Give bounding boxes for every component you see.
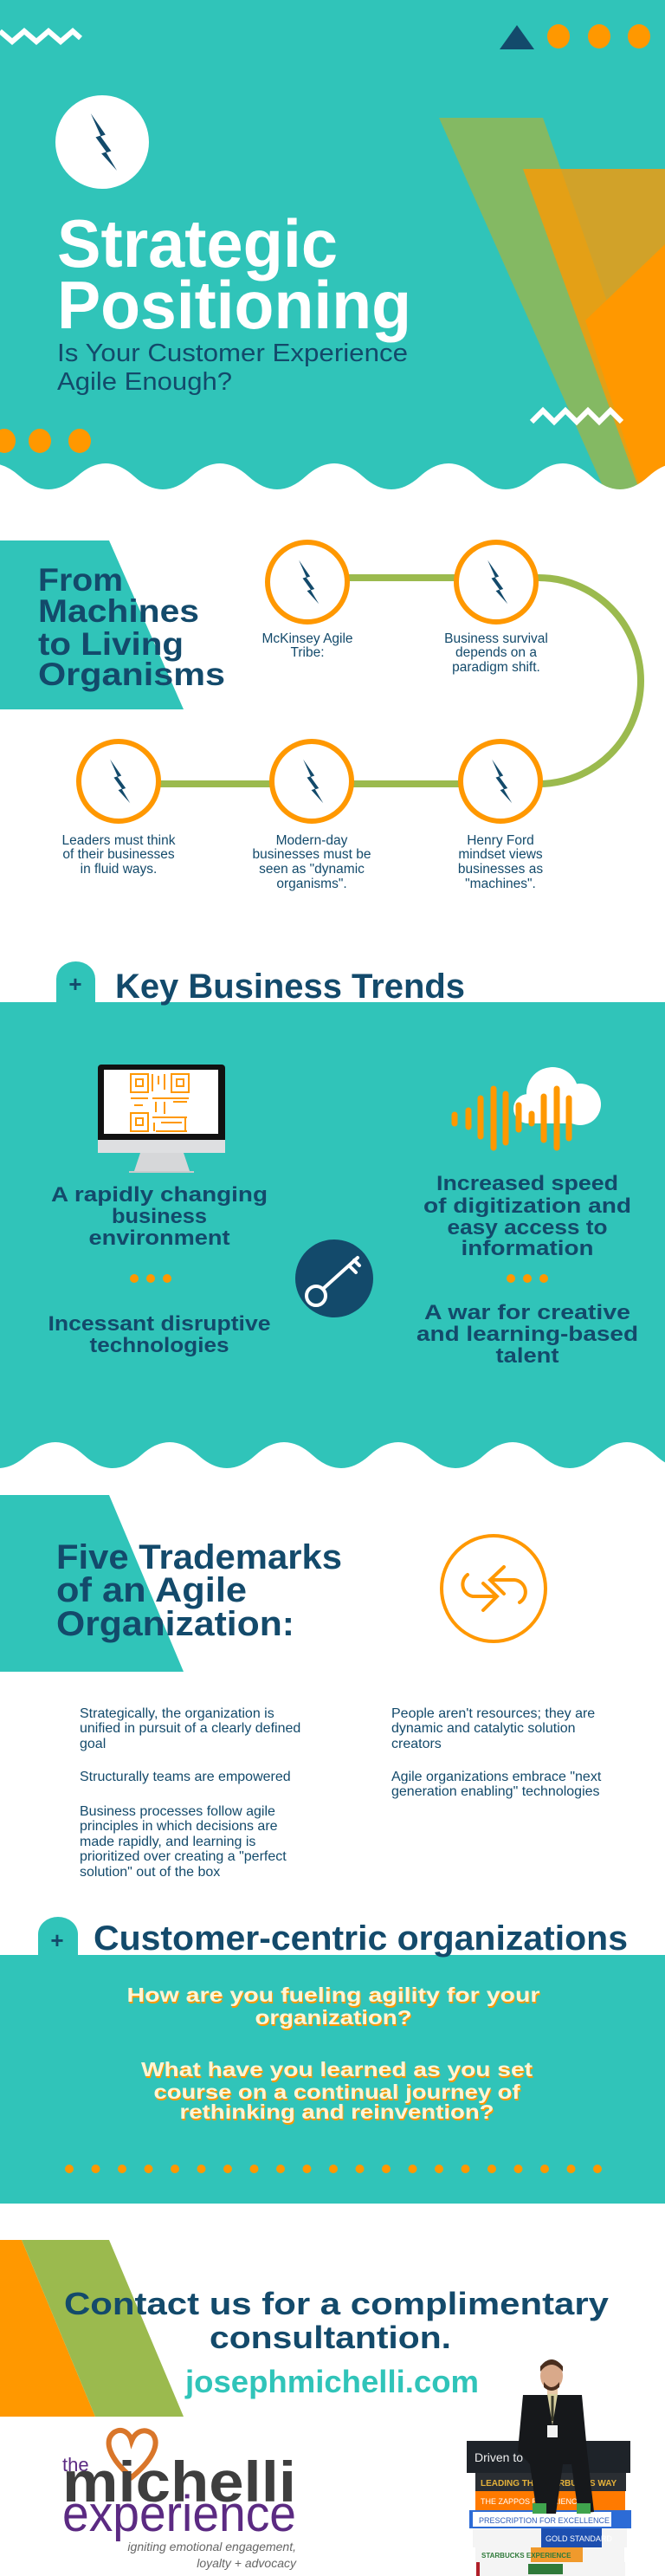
step: Modern-day [253,741,371,891]
step: Modern-day: seen as "dynamic [259,862,365,877]
photo: man on books [467,2359,631,2576]
panel: five trademarks [0,1495,602,1880]
panel: customer-centric organizations [0,1917,665,2204]
bullet list right: People aren't resources; they are [391,1706,595,1721]
text: digitization [423,1172,631,1260]
icon: monitor with QR [98,1065,225,1173]
logo: experience [62,2486,296,2542]
decorative stripes [0,2240,184,2417]
photo: man on books: GOLD STANDARD [546,2534,612,2543]
zigzag right [532,411,622,422]
text: war for talent: A war for creative [424,1301,630,1324]
connector path [119,578,641,784]
subtitle: Agile Enough? [57,368,232,396]
call to action [64,2286,609,2355]
step: Leaders: in fluid ways. [81,862,157,877]
question 2: course on a continual journey of [154,2082,521,2105]
bullet list left: principles in which decisions are [80,1819,278,1834]
step: Business survival: Business survival [444,631,548,646]
step: Leaders: Leaders must think [62,833,176,848]
heading background [0,1495,184,1672]
question 1: organization? [255,2006,412,2029]
title: Strategic [57,205,338,282]
step: Leaders [62,741,176,877]
bullet list right: dynamic and catalytic solution [391,1721,576,1736]
text: war for talent: and learning-based [416,1323,638,1346]
heading: Organisms [38,657,225,692]
photo: man on books: PRESCRIPTION FOR EXCELLENCE [479,2516,610,2525]
text: war for talent [416,1301,638,1368]
question 2: What have you learned as you set [141,2058,533,2081]
subtitle: Is Your Customer Experience [57,340,408,367]
step: Henry Ford [458,741,543,891]
step: Henry Ford: "machines". [465,877,536,891]
step: Henry Ford: Henry Ford [467,833,534,848]
text: war for talent: talent [495,1344,559,1368]
step: Modern-day: Modern-day [276,833,348,848]
heading tab: + [50,1927,64,1953]
bullet list left: Business processes follow agile [80,1804,275,1819]
bullet list right: Agile organizations embrace "next [391,1770,602,1784]
bullet list left: made rapidly, and learning is [80,1835,255,1849]
call to action: consultantion. [210,2320,451,2355]
bullet list left: solution" out of the box [80,1865,220,1880]
dots right [507,1274,548,1283]
photo: man on books: STARBUCKS EXPERIENCE [481,2552,571,2560]
heading tab: + [68,971,82,997]
heading background [0,540,184,709]
logo: michelli [62,2450,296,2514]
photo: man on books: Driven to Delight [475,2450,565,2464]
zigzag top left [0,31,81,42]
dots left [130,1274,171,1283]
panel: machines to organisms [0,540,641,891]
decorative shapes right [439,118,665,494]
dotted divider [65,2165,602,2173]
dots left [0,429,91,453]
panel: contact [0,2240,631,2576]
triangle and dots top right [500,24,650,49]
heading: Organization: [56,1605,294,1643]
subtitle [57,340,408,396]
step: Business survival: depends on a [455,645,537,660]
heading: to Living [38,626,184,662]
heading: Key Business Trends [115,968,465,1006]
step: McKinsey: McKinsey Agile [261,631,353,646]
call to action: Contact us for a complimentary [64,2286,609,2321]
icon: key [295,1239,373,1317]
heading: Customer-centric organizations [94,1919,628,1958]
question 1 [126,1984,541,2030]
step: Modern-day: businesses must be [253,847,371,862]
title [57,205,411,343]
heading tab [56,961,95,1002]
step: Business survival: paradigm shift. [452,660,540,675]
question 1: How are you fueling agility for your [128,1985,541,2008]
logo: loyalty + advocacy [197,2556,297,2570]
question 2: rethinking and reinvention? [180,2102,495,2125]
step: Leaders: of their businesses [62,847,175,862]
text: disruptive: technologies [90,1334,229,1357]
question 1: How are you fueling agility for your [126,1984,540,2006]
heading [56,1538,342,1643]
heading: Machines [38,593,199,629]
heading [38,562,225,692]
heading: of an Agile [56,1571,247,1609]
logo [62,2430,297,2570]
man [518,2395,594,2514]
text: digitization: of digitization and [423,1194,631,1218]
logo: igniting emotional engagement, [127,2540,296,2553]
icon: lightning in white circle [55,95,149,189]
bullet list left [80,1706,300,1880]
question 2: What have you learned as you set [142,2060,533,2082]
icon: cloud with sound wave [455,1067,601,1148]
question 1: organization? [256,2008,412,2030]
step: Henry Ford: businesses as [458,862,543,877]
photo: man on books: THE ZAPPOS EXPERIENCE [481,2497,583,2506]
step: McKinsey [261,542,353,660]
bullet list left: Structurally teams are empowered [80,1770,291,1784]
question 2: course on a continual journey of [154,2081,520,2103]
step: Modern-day: organisms". [276,877,347,891]
text: digitization: information [461,1237,594,1260]
text: digitization: easy access to [447,1216,608,1239]
title: Positioning [57,267,411,343]
heading: Five Trademarks [56,1538,342,1576]
bullet list right: generation enabling" technologies [391,1784,600,1799]
bullet list left: unified in pursuit of a clearly defined [80,1721,300,1736]
question 2: rethinking and reinvention? [180,2100,494,2123]
text: disruptive [48,1312,270,1357]
step: McKinsey: Tribe: [290,645,325,660]
text: digitization: Increased speed [436,1172,618,1195]
bullet list left: Strategically, the organization is [80,1706,274,1721]
text: rapidly changing [51,1183,268,1250]
heading tab [38,1917,78,1955]
icon: refresh arrows [442,1536,546,1641]
bullet list left: goal [80,1737,106,1751]
text: rapidly changing: business [112,1205,207,1228]
website: josephmichelli.com [184,2364,479,2399]
text: rapidly changing: A rapidly changing [51,1183,268,1207]
heading: From [38,562,123,598]
bullet list right: creators [391,1737,442,1751]
bullet list right [391,1706,602,1799]
photo: man on books: LEADING THE STARBUCKS WAY [481,2479,617,2489]
text: disruptive: Incessant disruptive [48,1312,270,1336]
logo: the [62,2454,89,2476]
question 2 [141,2058,533,2125]
text: rapidly changing: environment [88,1227,230,1250]
panel: key business trends [0,961,665,1481]
step: Henry Ford: mindset views [458,847,543,862]
step: Business survival [444,542,548,675]
bullet list left: prioritized over creating a "perfect [80,1849,287,1864]
hero panel [0,0,665,520]
